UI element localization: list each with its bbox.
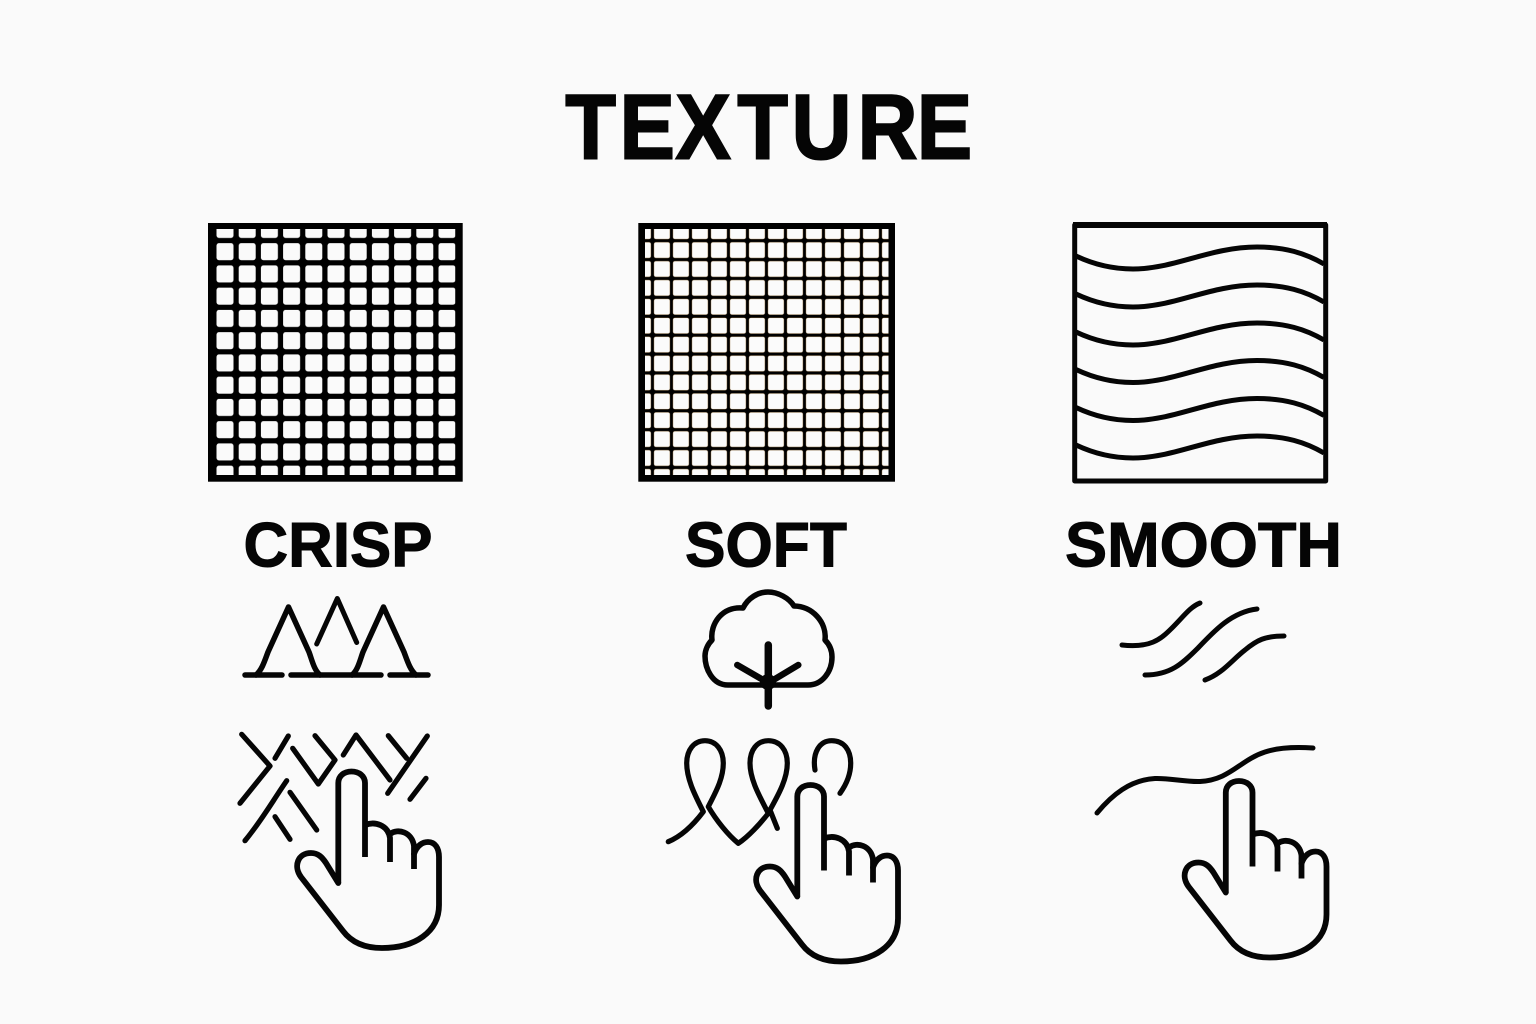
icon: soft loops <box>668 741 851 843</box>
icon: crisp scratch marks <box>240 734 427 841</box>
icon: smooth touching hand <box>1185 781 1326 958</box>
icon: soft touching hand <box>756 785 898 962</box>
title: TEXTURE <box>565 75 972 178</box>
crisp label: CRISP <box>244 510 432 580</box>
soft label: SOFT <box>685 510 847 580</box>
panel: soft column <box>638 223 898 962</box>
smooth wave swatch <box>1073 225 1327 481</box>
icon: cotton boll <box>705 592 832 706</box>
soft grid swatch <box>638 223 895 482</box>
crisp grid swatch <box>208 223 463 482</box>
smooth label: SMOOTH <box>1065 510 1342 580</box>
panel: crisp column <box>208 223 463 948</box>
panel: smooth column <box>1065 225 1342 958</box>
icon: smooth surface line <box>1097 747 1313 813</box>
icon: crisp touching hand <box>297 772 439 948</box>
icon: crisp peaks <box>245 598 428 675</box>
icon: smooth flowing lines <box>1122 603 1284 680</box>
